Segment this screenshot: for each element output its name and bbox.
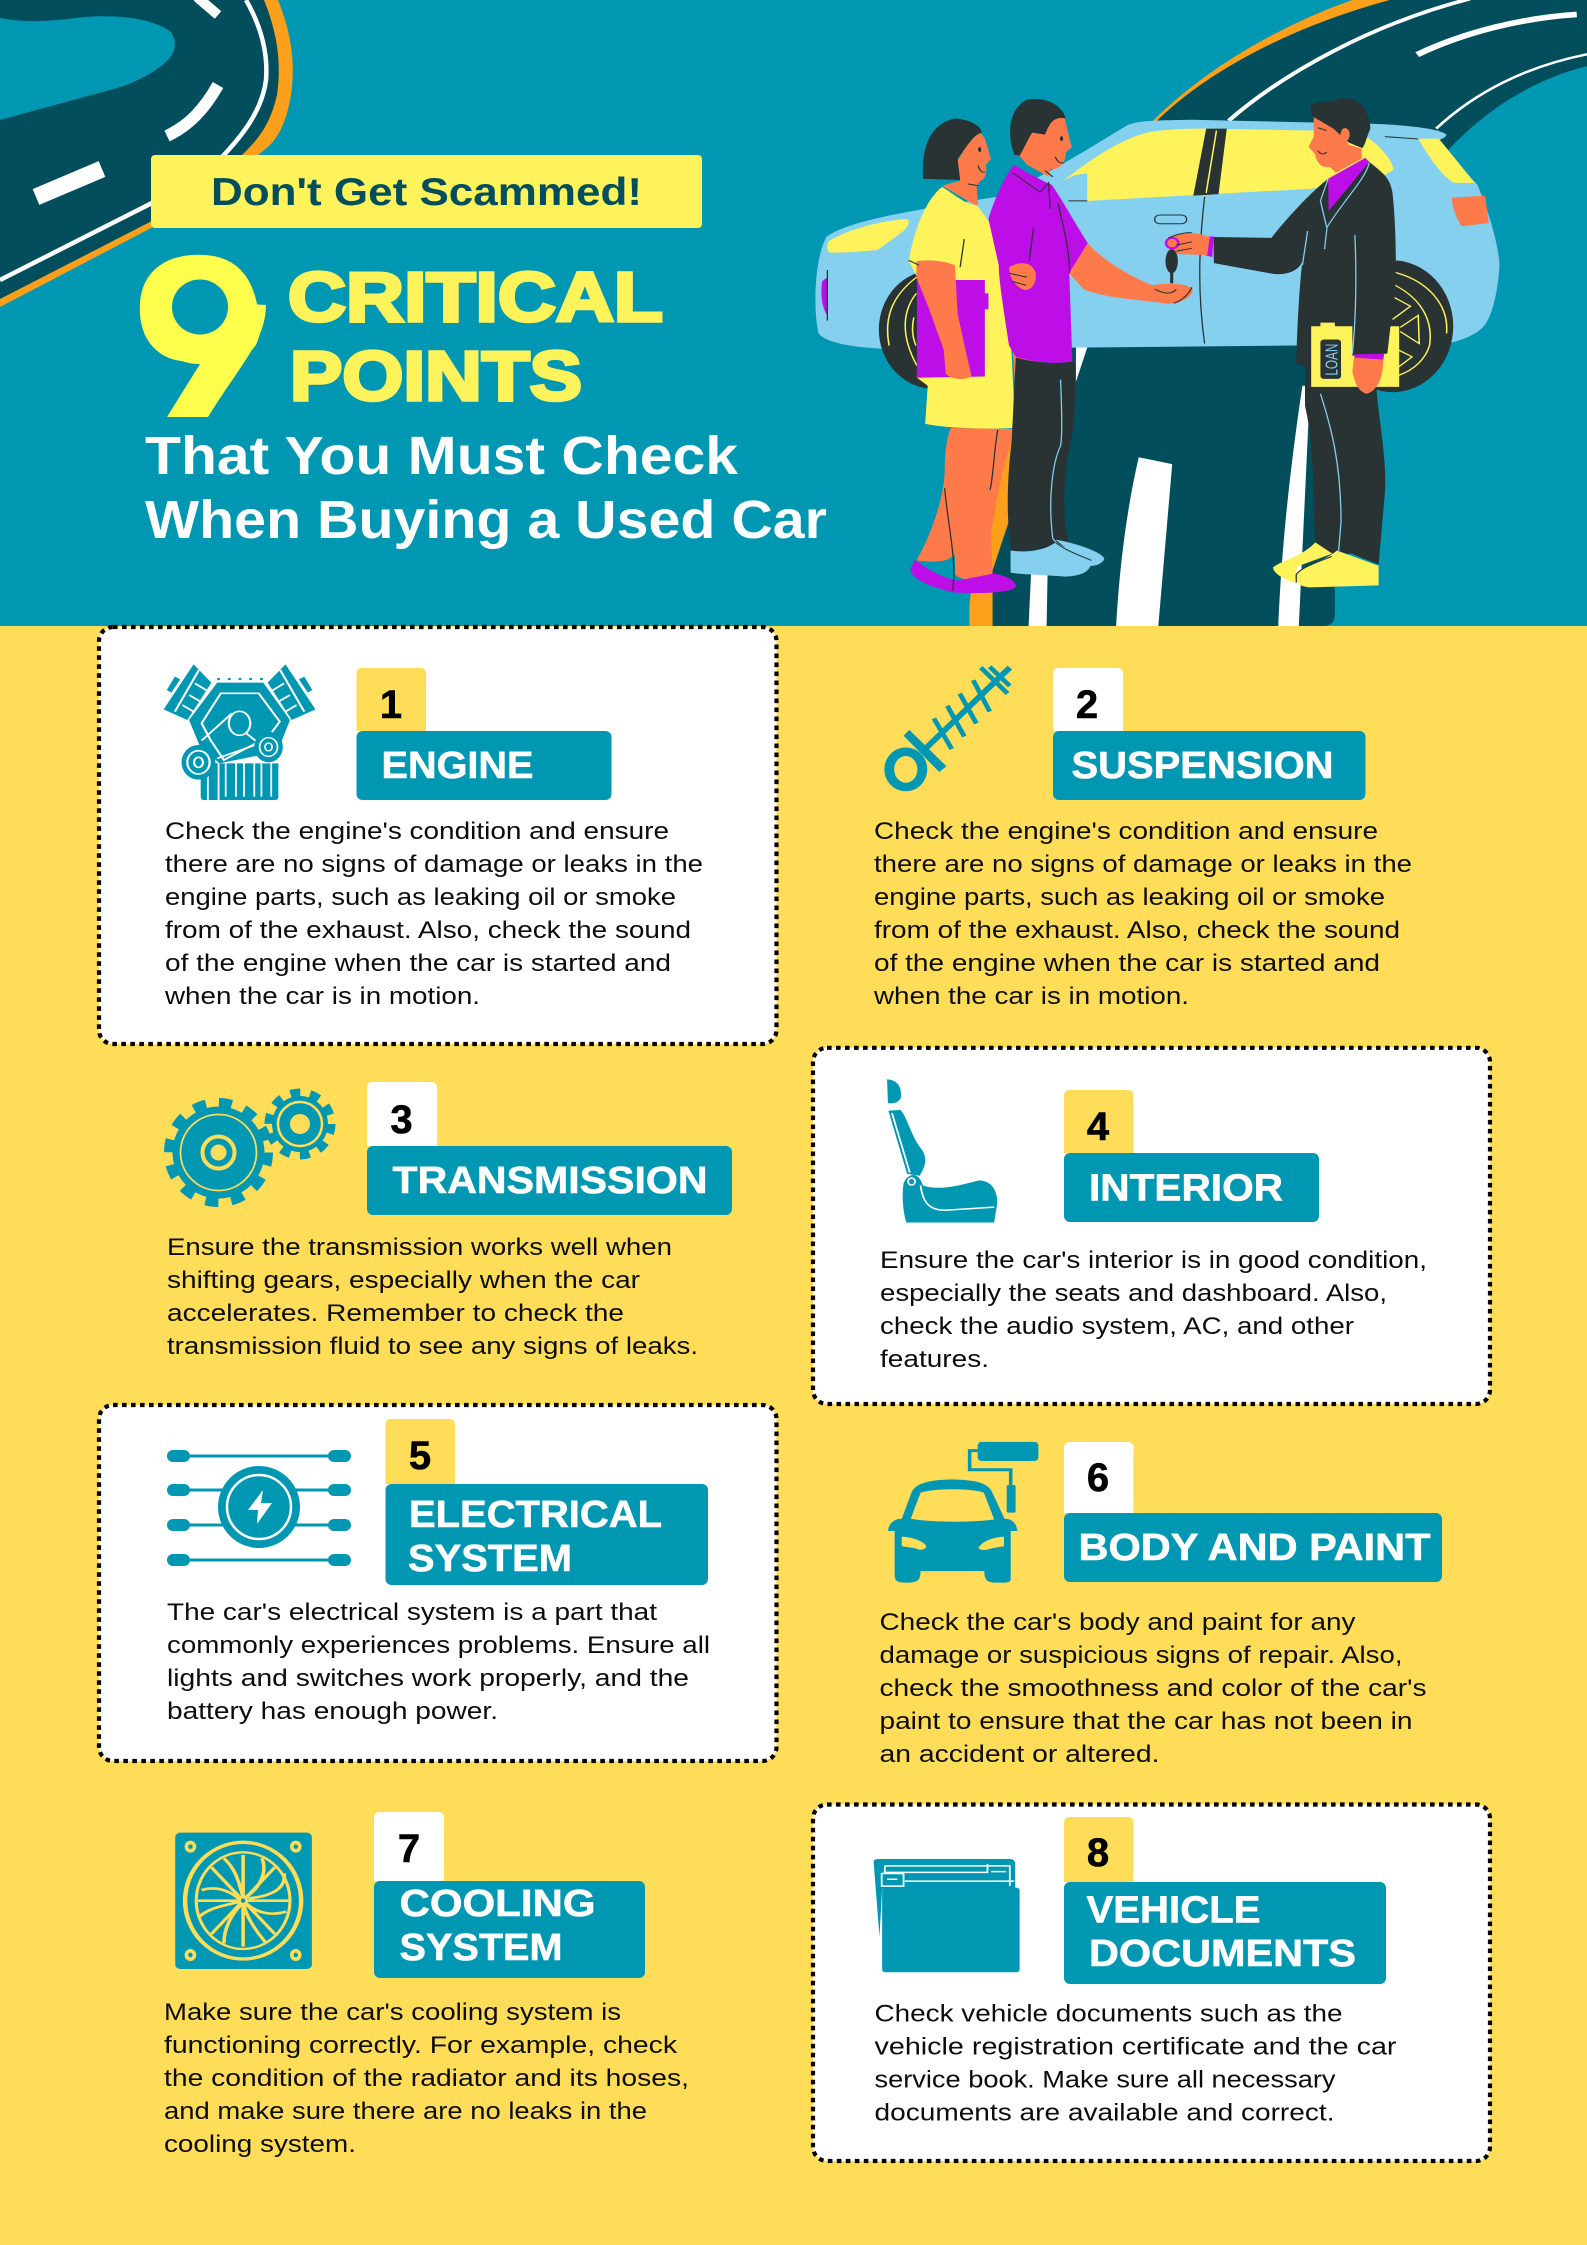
title: Critical Points: CRITICAL	[288, 258, 663, 336]
body text	[880, 1247, 1427, 1373]
number badge: 2	[1076, 683, 1098, 727]
car windows	[1053, 129, 1394, 201]
car body	[815, 120, 1500, 349]
body text: engine parts, such as leaking oil or smoke	[165, 884, 676, 911]
door pillar	[1193, 129, 1227, 196]
heading	[1064, 1882, 1386, 1984]
body text: of the engine when the car is started and	[165, 950, 671, 977]
title: big number 9	[140, 254, 266, 417]
body text: vehicle registration certificate and the car	[874, 2034, 1397, 2060]
panel: 5 electrical system	[99, 1405, 776, 1761]
heading: BODY AND PAINT	[1078, 1527, 1430, 1569]
number badge: 8	[1087, 1831, 1109, 1875]
heading: SYSTEM	[408, 1538, 572, 1580]
body text: of the engine when the car is started and	[874, 950, 1380, 977]
illustration: car and three people	[815, 98, 1500, 593]
headlight	[827, 219, 909, 253]
icon: radiator fan	[175, 1833, 312, 1969]
icon: document folder	[874, 1859, 1020, 1972]
body text	[164, 1999, 689, 2158]
icon: gears	[170, 1093, 331, 1202]
panel border	[813, 1804, 1490, 2161]
road graphic: top left	[0, 0, 293, 307]
salesman	[1166, 98, 1399, 587]
body text: documents are available and correct.	[874, 2100, 1334, 2126]
body text	[167, 1599, 710, 1725]
body text: The car's electrical system is a part that	[167, 1599, 657, 1626]
number badge: 1	[380, 683, 402, 727]
number badge	[356, 668, 426, 731]
heading	[367, 1146, 732, 1215]
body text: service book. Make sure all necessary	[874, 2066, 1336, 2094]
heading	[386, 1484, 708, 1585]
heading: SUSPENSION	[1072, 745, 1334, 787]
panel border	[99, 1405, 776, 1761]
title: Critical Points	[288, 258, 663, 415]
body text: an accident or altered.	[880, 1741, 1160, 1768]
front marker	[821, 277, 827, 315]
body text: there are no signs of damage or leaks in the	[165, 851, 703, 878]
subtitle	[145, 426, 827, 550]
title: big number 9: 9	[133, 209, 267, 462]
heading: INTERIOR	[1089, 1168, 1283, 1210]
body text: battery has enough power.	[167, 1698, 498, 1725]
body text: check the audio system, AC, and other	[880, 1313, 1354, 1340]
body text	[873, 818, 1412, 1010]
side mirror area	[1053, 174, 1087, 202]
number badge	[1064, 1442, 1134, 1513]
body text	[164, 818, 703, 1010]
number badge	[1064, 1090, 1134, 1153]
banner: Don't Get Scammed	[151, 155, 702, 228]
body text: Check vehicle documents such as the	[874, 2000, 1342, 2028]
hero banner background	[0, 0, 1587, 626]
car trim lines	[827, 137, 1418, 344]
icon: car seat	[887, 1079, 997, 1222]
panel border	[99, 627, 776, 1044]
body text: shifting gears, especially when the car	[167, 1267, 640, 1294]
road graphic: top right and vertical road	[969, 0, 1587, 626]
panel: 4 interior	[813, 1048, 1490, 1404]
subtitle: When Buying a Used Car	[145, 490, 827, 550]
heading	[1064, 1153, 1319, 1222]
body text: commonly experiences problems. Ensure all	[167, 1632, 710, 1659]
body text: there are no signs of damage or leaks in the	[874, 851, 1412, 878]
panel: 1 engine	[99, 627, 776, 1044]
front wheel	[879, 270, 990, 389]
number badge: 5	[409, 1434, 431, 1478]
body text: from of the exhaust. Also, check the sound	[874, 917, 1400, 944]
panel: 7 cooling system	[164, 1812, 689, 2158]
panel: 2 suspension	[873, 667, 1412, 1010]
icon: electrical	[167, 1450, 351, 1566]
rear wheel	[1332, 260, 1453, 392]
heading: VEHICLE	[1086, 1890, 1260, 1932]
panel: 6 body and paint	[880, 1442, 1442, 1768]
heading	[356, 731, 612, 800]
body text: Make sure the car's cooling system is	[164, 1999, 621, 2026]
body text	[874, 2000, 1397, 2126]
number badge: 7	[398, 1827, 420, 1871]
body text: check the smoothness and color of the car's	[880, 1675, 1426, 1702]
door handle	[1155, 215, 1187, 224]
icon: car with paint roller	[888, 1442, 1038, 1583]
body text: lights and switches work properly, and the	[167, 1665, 689, 1692]
number badge: 4	[1087, 1105, 1110, 1149]
rear window	[1418, 139, 1475, 183]
LOAN tag: LOAN	[1323, 344, 1342, 376]
tail light	[1452, 196, 1489, 226]
body text: Ensure the car's interior is in good condition,	[880, 1247, 1427, 1274]
body text: and make sure there are no leaks in the	[164, 2098, 647, 2125]
body text: functioning correctly. For example, check	[164, 2032, 678, 2059]
number badge	[386, 1419, 455, 1484]
body text: from of the exhaust. Also, check the sound	[165, 917, 691, 944]
man in purple shirt	[988, 99, 1193, 577]
body text	[880, 1609, 1426, 1768]
body text: Check the engine's condition and ensure	[874, 818, 1378, 845]
body text: damage or suspicious signs of repair. Also,	[880, 1642, 1402, 1669]
heading: ELECTRICAL	[409, 1494, 662, 1536]
body text: when the car is in motion.	[873, 983, 1189, 1010]
body text: features.	[880, 1346, 989, 1373]
car key	[1166, 238, 1178, 283]
body text: Check the engine's condition and ensure	[165, 818, 669, 845]
body text: cooling system.	[164, 2131, 356, 2158]
heading: SYSTEM	[400, 1927, 562, 1969]
heading	[1064, 1513, 1442, 1582]
body text: the condition of the radiator and its hoses,	[164, 2065, 689, 2092]
number badge	[1053, 668, 1123, 731]
woman	[909, 119, 1036, 593]
panel: 8 vehicle documents	[813, 1804, 1490, 2161]
heading: TRANSMISSION	[392, 1160, 708, 1202]
heading	[374, 1881, 645, 1978]
title: Critical Points: POINTS	[290, 337, 582, 415]
body text: engine parts, such as leaking oil or smoke	[874, 884, 1385, 911]
body text: Ensure the transmission works well when	[167, 1234, 672, 1261]
heading: DOCUMENTS	[1089, 1933, 1356, 1975]
body text	[167, 1234, 698, 1360]
body text: especially the seats and dashboard. Also,	[880, 1280, 1387, 1307]
heading: COOLING	[400, 1883, 596, 1925]
panel: 3 transmission	[167, 1082, 732, 1360]
number badge: 3	[390, 1098, 413, 1142]
heading	[1053, 731, 1366, 800]
number badge: 6	[1087, 1456, 1109, 1500]
body text: accelerates. Remember to check the	[167, 1300, 624, 1327]
icon: engine	[164, 664, 315, 800]
subtitle: That You Must Check	[145, 426, 739, 486]
banner: Don't Get Scammed: Don't Get Scammed!	[211, 171, 642, 214]
pillar highlight	[1206, 131, 1216, 193]
heading: ENGINE	[382, 745, 534, 787]
body text: transmission fluid to see any signs of leaks.	[167, 1333, 698, 1360]
body text: Check the car's body and paint for any	[880, 1609, 1356, 1636]
number badge	[374, 1812, 444, 1881]
body text: when the car is in motion.	[164, 983, 480, 1010]
icon: suspension	[889, 667, 1010, 787]
number badge	[367, 1082, 437, 1146]
body text: paint to ensure that the car has not been in	[880, 1708, 1412, 1735]
number badge	[1064, 1817, 1134, 1882]
panel border	[813, 1048, 1490, 1404]
